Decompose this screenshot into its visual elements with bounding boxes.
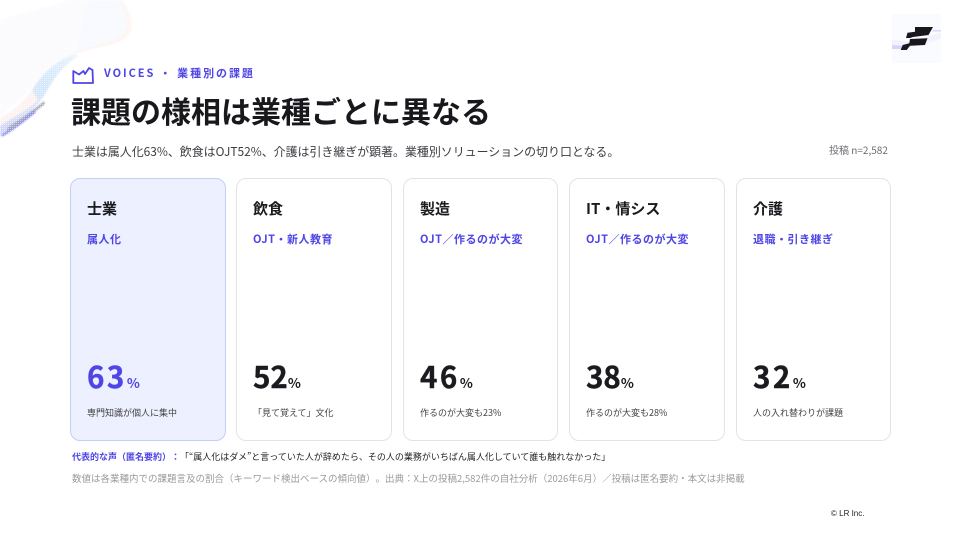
panel: 士業 [70, 178, 226, 441]
士業 keyword: 属人化 [87, 231, 122, 247]
copyright: © LR Inc. [831, 509, 864, 518]
介護 description: 人の入れ替わりが課題 [753, 406, 843, 419]
title: 課題の様相は業種ごとに異なる [71, 88, 491, 132]
source note: 数値は各業種内での課題言及の割合（キーワード検出ベースの傾向値）。出典：X上の投稿2,582件の自社分析（2026年6月）／投稿は匿名要約・本文は非掲載 [72, 471, 745, 485]
士業 value: 63% [87, 355, 140, 397]
IT・情シス description: 作るのが大変も28% [586, 406, 667, 419]
panel: 製造 [403, 178, 558, 441]
eyebrow: VOICES ・ 業種別の課題 [104, 65, 255, 81]
士業 name: 士業 [87, 198, 117, 219]
介護 keyword: 退職・引き継ぎ [753, 231, 834, 247]
subtitle: 士業は属人化63%、飲食はOJT52%、介護は引き継ぎが顕著。業種別ソリューションの切り口となる。 [72, 143, 619, 160]
IT・情シス value: 38% [586, 355, 634, 397]
介護 value: 32% [753, 355, 806, 397]
介護 name: 介護 [753, 198, 783, 219]
icon: factory [72, 67, 94, 84]
logo mark [892, 27, 941, 50]
製造 keyword: OJT／作るのが大変 [420, 231, 523, 247]
decorative wave background [0, 0, 132, 138]
sample size: 投稿 n=2,582 [829, 142, 888, 157]
representative quote: 代表的な声（匿名要約）：「“属人化はダメ”と言っていた人が辞めたら、その人の業務がいちばん属人化していて誰も触れなかった」 [72, 450, 610, 463]
製造 description: 作るのが大変も23% [420, 406, 501, 419]
IT・情シス name: IT・情シス [586, 198, 660, 219]
士業 description: 専門知識が個人に集中 [87, 406, 177, 419]
製造 value: 46% [420, 355, 473, 397]
panel: IT・情シス [569, 178, 725, 441]
logo strokes [901, 27, 933, 50]
飲食 description: 「見て覚えて」文化 [253, 406, 334, 419]
panel: 飲食 [236, 178, 392, 441]
飲食 value: 52% [253, 355, 301, 397]
飲食 name: 飲食 [253, 198, 283, 219]
panel: 介護 [736, 178, 891, 441]
製造 name: 製造 [420, 198, 450, 219]
飲食 keyword: OJT・新人教育 [253, 231, 333, 247]
IT・情シス keyword: OJT／作るのが大変 [586, 231, 689, 247]
